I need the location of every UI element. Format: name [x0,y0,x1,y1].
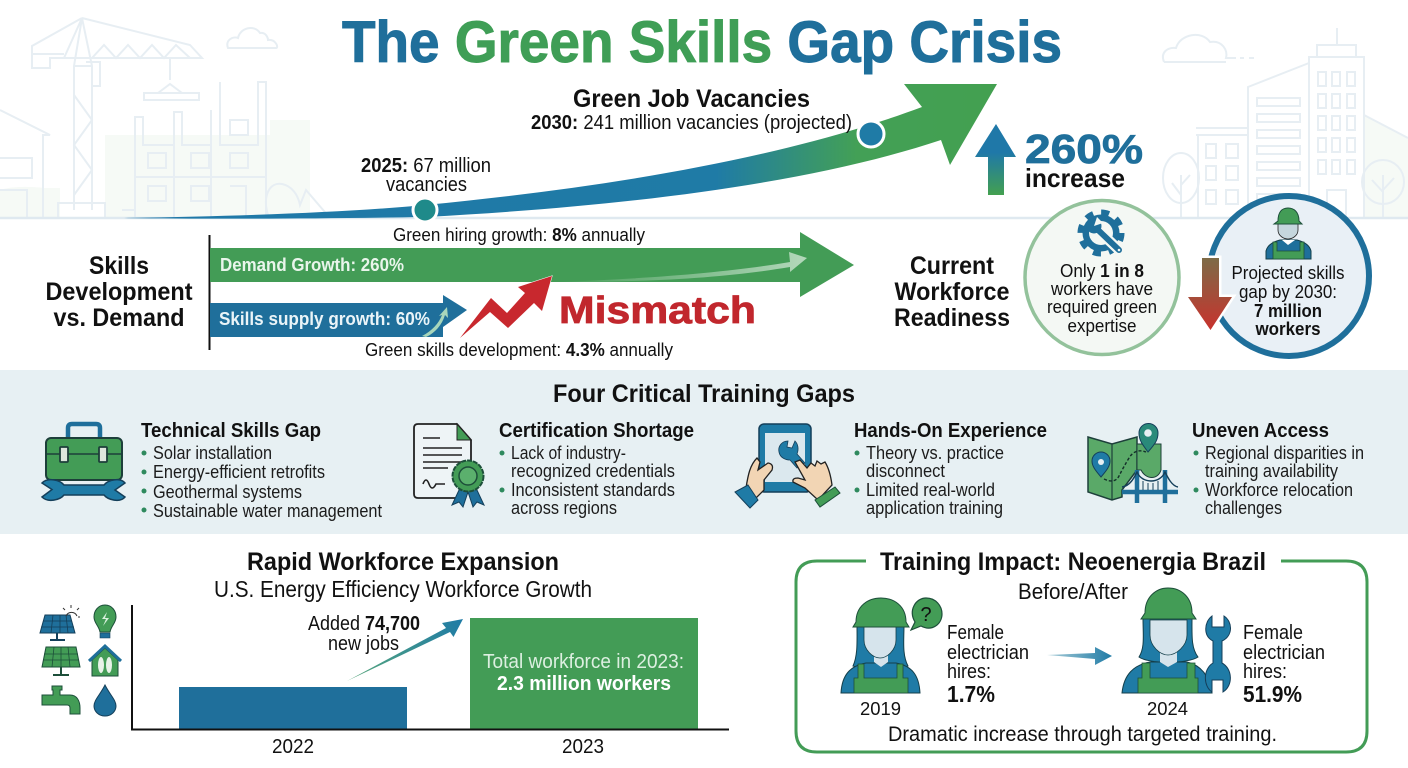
heading: current workforce readiness: Current [910,252,995,280]
chart: green job vacancies growth arrow [120,84,997,222]
callout: 1 in 8 workers [1025,200,1179,354]
gap: hands-on experience: application training [866,498,1003,518]
gap: technical skills [42,420,382,521]
icon: solar panel with sun [40,605,80,640]
gap: uneven access: Workforce relocation [1205,480,1353,500]
arrow: before to after [1047,647,1112,665]
heading: green job vacancies: 2030: 241 million vacancies (projected) [531,112,852,134]
icon: red zigzag arrow [460,276,552,338]
background skyline: left cloud [227,28,277,48]
bar: 2022 [179,687,407,728]
stat: 2019: Female [947,622,1004,644]
heading: Four Critical Training Gaps [553,380,855,408]
gap: hands-on experience: Limited real-world [866,480,995,500]
gap: uneven access: training availability [1205,461,1338,481]
gap: certification shortage: Certification Shortage [499,420,694,442]
icon: 2024 female worker [1122,588,1212,693]
callout: 1 in 8 workers: Only 1 in 8 [1060,261,1144,281]
stat: 2024: Female [1243,622,1303,644]
label: added jobs: new jobs [328,633,399,655]
gap: hands-on experience [735,420,1047,518]
stat: 2019: electrician [947,642,1029,664]
label: hiring growth: Green hiring growth: 8% annually [393,225,645,245]
bar: 2023 [470,618,698,728]
bar chart: workforce growth [132,605,729,758]
horizon line [0,217,1408,219]
callout: projected skills gap: 7 million [1254,301,1322,321]
callout: projected skills gap: Projected skills [1232,263,1344,283]
gap: technical skills: Geothermal systems [153,482,302,502]
stat: 260% increase [1025,126,1143,193]
marker: 2030 [858,121,884,147]
heading: rapid workforce expansion: Rapid Workforce Expansion [247,548,559,576]
callout: 1 in 8 workers: expertise [1068,316,1136,336]
icon: question bubble: ? [920,604,932,626]
callout: 1 in 8 workers: workers have [1050,279,1153,299]
callout: projected skills gap [1209,196,1369,356]
stat: 2019: hires: [947,661,991,683]
icon: tablet and hands [735,424,840,508]
axis labels: 2023 [562,736,604,758]
arrow: demand growth: Demand Growth: 260% [220,255,404,275]
section: skills development vs demand [46,225,854,360]
stat: 2019 [860,622,1029,719]
background skyline: right city buildings [1163,28,1408,218]
icon: light bulb [94,605,116,638]
gap: technical skills: Sustainable water management [153,501,382,521]
arrow: demand growth [210,232,854,297]
icon: faucet [42,686,80,714]
stat: 2024: 51.9% [1243,681,1302,707]
callout: projected skills gap: gap by 2030: [1239,282,1337,302]
gap: hands-on experience: Hands-On Experience [854,420,1047,442]
arrow: skills supply growth: Skills supply growth: 60% [219,309,430,329]
icon: question bubble [911,598,942,630]
label: total workforce [483,651,684,695]
arrow: skills supply growth [210,295,467,337]
gap: hands-on experience: Theory vs. practice [866,443,1004,463]
stat: 2024: electrician [1243,642,1325,664]
panel: four critical training gaps [0,370,1408,534]
label: total workforce: Total workforce in 2023: [483,651,684,673]
label: 2025 vacancies [361,155,491,196]
gap: uneven access [1088,420,1364,518]
gap: certification shortage: across regions [511,498,617,518]
icon: up arrow [975,124,1016,195]
axis labels: 2022 [272,736,314,758]
gap: certification shortage: Lack of industry- [511,443,626,463]
icon: red down arrow [1188,258,1232,330]
heading: green job vacancies: Green Job Vacancies [573,85,810,113]
background skyline: right cloud [1163,35,1254,62]
label: added jobs: Added 74,700 [308,613,420,635]
icon: worker with hard hat [1266,208,1311,259]
gap: technical skills: Energy-efficient retrofits [153,462,325,482]
label: total workforce: 2.3 million workers [497,673,671,695]
icon: gear and wrench [1080,212,1122,254]
icon: water drop [94,685,116,716]
icon: toolbox and wrench [42,424,125,500]
icon: wrench [1205,616,1231,692]
stat: 2024 [1147,622,1325,719]
gap: uneven access: Regional disparities in [1205,443,1364,463]
heading: rapid workforce expansion [214,548,592,602]
axis labels [272,736,604,758]
label: 2025 vacancies: vacancies [386,174,467,196]
heading: vs. Demand [54,304,184,332]
icon: green solar panel [42,647,80,675]
panel: training impact neoenergia brazil [796,548,1367,752]
title: The Green Skills Gap Crisis [342,10,1062,75]
heading [46,252,193,332]
icon: 2019 female worker [841,598,920,693]
icon: map, pins and bridge [1088,424,1178,503]
stat: 2019: 1.7% [947,681,995,707]
stat: 260% increase: 260% [1025,126,1143,172]
callout: 1 in 8 workers: required green [1047,297,1157,317]
gap: certification shortage [414,420,694,518]
gap: hands-on experience: disconnect [866,461,945,481]
background skyline: left construction scene [0,18,330,218]
heading: current workforce readiness: Workforce [894,278,1010,306]
icons: green sectors [40,605,121,716]
heading: rapid workforce expansion: U.S. Energy Efficiency Workforce Growth [214,576,592,602]
note: Dramatic increase through targeted training. [888,723,1277,746]
heading: Development [46,278,193,306]
gap: technical skills: Technical Skills Gap [141,420,321,442]
marker: 2025 [413,198,437,222]
heading: current workforce readiness: Readiness [894,304,1010,332]
stat: 2024: 2024 [1147,699,1188,719]
gap: uneven access: challenges [1205,498,1282,518]
label: added jobs [308,613,420,655]
heading: green job vacancies [531,85,852,134]
stat: 2024: hires: [1243,661,1287,683]
stat: 260% increase: increase [1025,163,1125,193]
stat: 2019: 2019 [860,699,901,719]
gap: certification shortage: Inconsistent standards [511,480,675,500]
callout: projected skills gap: workers [1255,319,1320,339]
gap: certification shortage: recognized credentials [511,461,675,481]
label: 2025 vacancies: 2025: 67 million [361,155,491,177]
arrow: added jobs [347,619,463,681]
label: skills development rate: Green skills development: 4.3% annually [365,340,673,360]
icon: certificate with seal [414,424,484,507]
icon: green house [89,646,121,676]
subheading: Before/After [1018,579,1128,604]
heading: current workforce readiness [894,252,1010,332]
heading: Skills [89,252,149,280]
gap: uneven access: Uneven Access [1192,420,1329,442]
gap: technical skills: Solar installation [153,443,272,463]
label: mismatch: Mismatch [559,290,756,332]
heading: Training Impact: Neoenergia Brazil [880,548,1266,576]
